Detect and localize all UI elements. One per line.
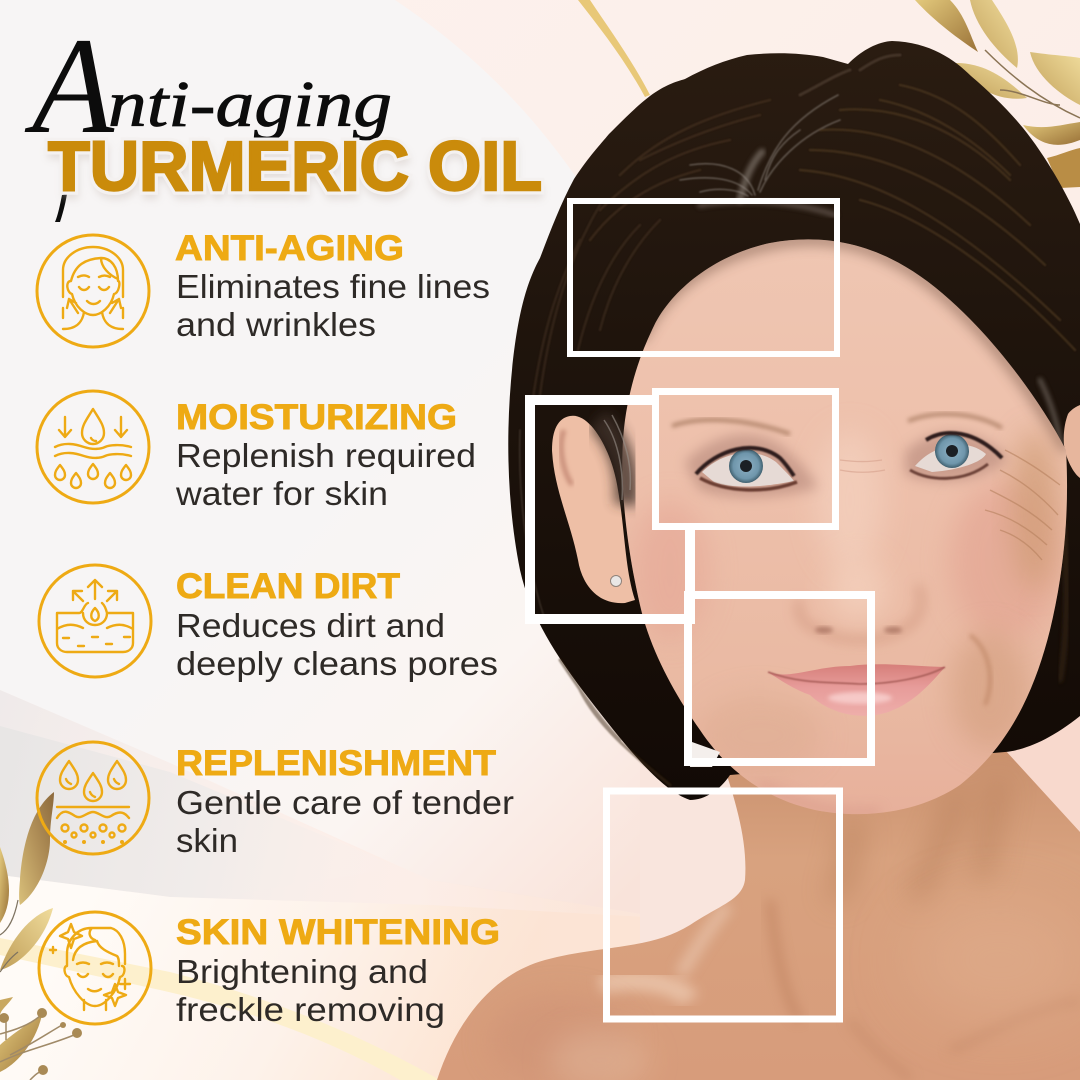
frame: eye [656, 392, 836, 526]
benefit: anti-aging [37, 229, 490, 347]
decoration: bottom left gold leaves [0, 792, 82, 1080]
title script: nti-aging: nti-aging [108, 68, 392, 141]
icon: water drop and waves [37, 391, 149, 503]
lips [768, 664, 945, 716]
nose [799, 558, 921, 639]
heading: moisturizing: MOISTURIZING [176, 398, 457, 437]
neck and shoulders [430, 740, 1080, 1080]
benefit: clean dirt [39, 565, 498, 682]
face [622, 239, 1067, 814]
title halo: TURMERIC OIL [48, 127, 542, 205]
title shadow: TURMERIC OIL [50, 133, 542, 211]
benefit: replenishment: skin [176, 822, 238, 859]
frame: mouth [688, 595, 871, 762]
left eye [672, 420, 818, 497]
icon: glowing face [39, 912, 151, 1024]
hair [508, 41, 1080, 800]
right ear edge [1064, 405, 1080, 478]
description: replenishment: Gentle care of tender [176, 784, 514, 821]
description: skin whitening: Brightening and [176, 953, 428, 990]
frame: forehead [570, 201, 837, 354]
earring [610, 576, 622, 586]
portrait [430, 41, 1080, 1080]
icon: face lifting [37, 235, 149, 347]
title script capital A: A [24, 9, 115, 162]
icon: drops on skin layers [37, 742, 149, 854]
ear [552, 416, 635, 603]
benefit: moisturizing [37, 391, 476, 512]
benefit: moisturizing: water for skin [175, 475, 388, 512]
title main: Turmeric Oil: TURMERIC OIL [48, 127, 542, 205]
benefit: skin whitening [39, 912, 500, 1028]
description: clean dirt: Reduces dirt and [176, 607, 445, 644]
white frames [530, 201, 871, 1019]
title [24, 9, 542, 222]
hair strands [520, 55, 1075, 785]
description: anti-aging: Eliminates fine lines [176, 268, 490, 305]
benefit: anti-aging: and wrinkles [176, 306, 376, 343]
benefit: skin whitening: freckle removing [176, 991, 445, 1028]
light patch beside jaw [690, 742, 720, 767]
heading: anti-aging: ANTI-AGING [175, 229, 404, 268]
heading: skin whitening: SKIN WHITENING [176, 913, 500, 952]
title stem stroke [55, 194, 67, 222]
heading: clean dirt: CLEAN DIRT [176, 567, 400, 606]
right eye [905, 414, 1008, 481]
frame: neck [606, 791, 840, 1019]
benefit: clean dirt: deeply cleans pores [176, 645, 498, 682]
benefit: replenishment [37, 742, 514, 859]
description: moisturizing: Replenish required [176, 437, 476, 474]
decoration: top right gold leaves [915, 0, 1080, 188]
face shading [632, 239, 1066, 813]
icon: pore cleansing [39, 565, 151, 677]
heading: replenishment: REPLENISHMENT [176, 744, 496, 783]
frame: ear [530, 400, 690, 619]
